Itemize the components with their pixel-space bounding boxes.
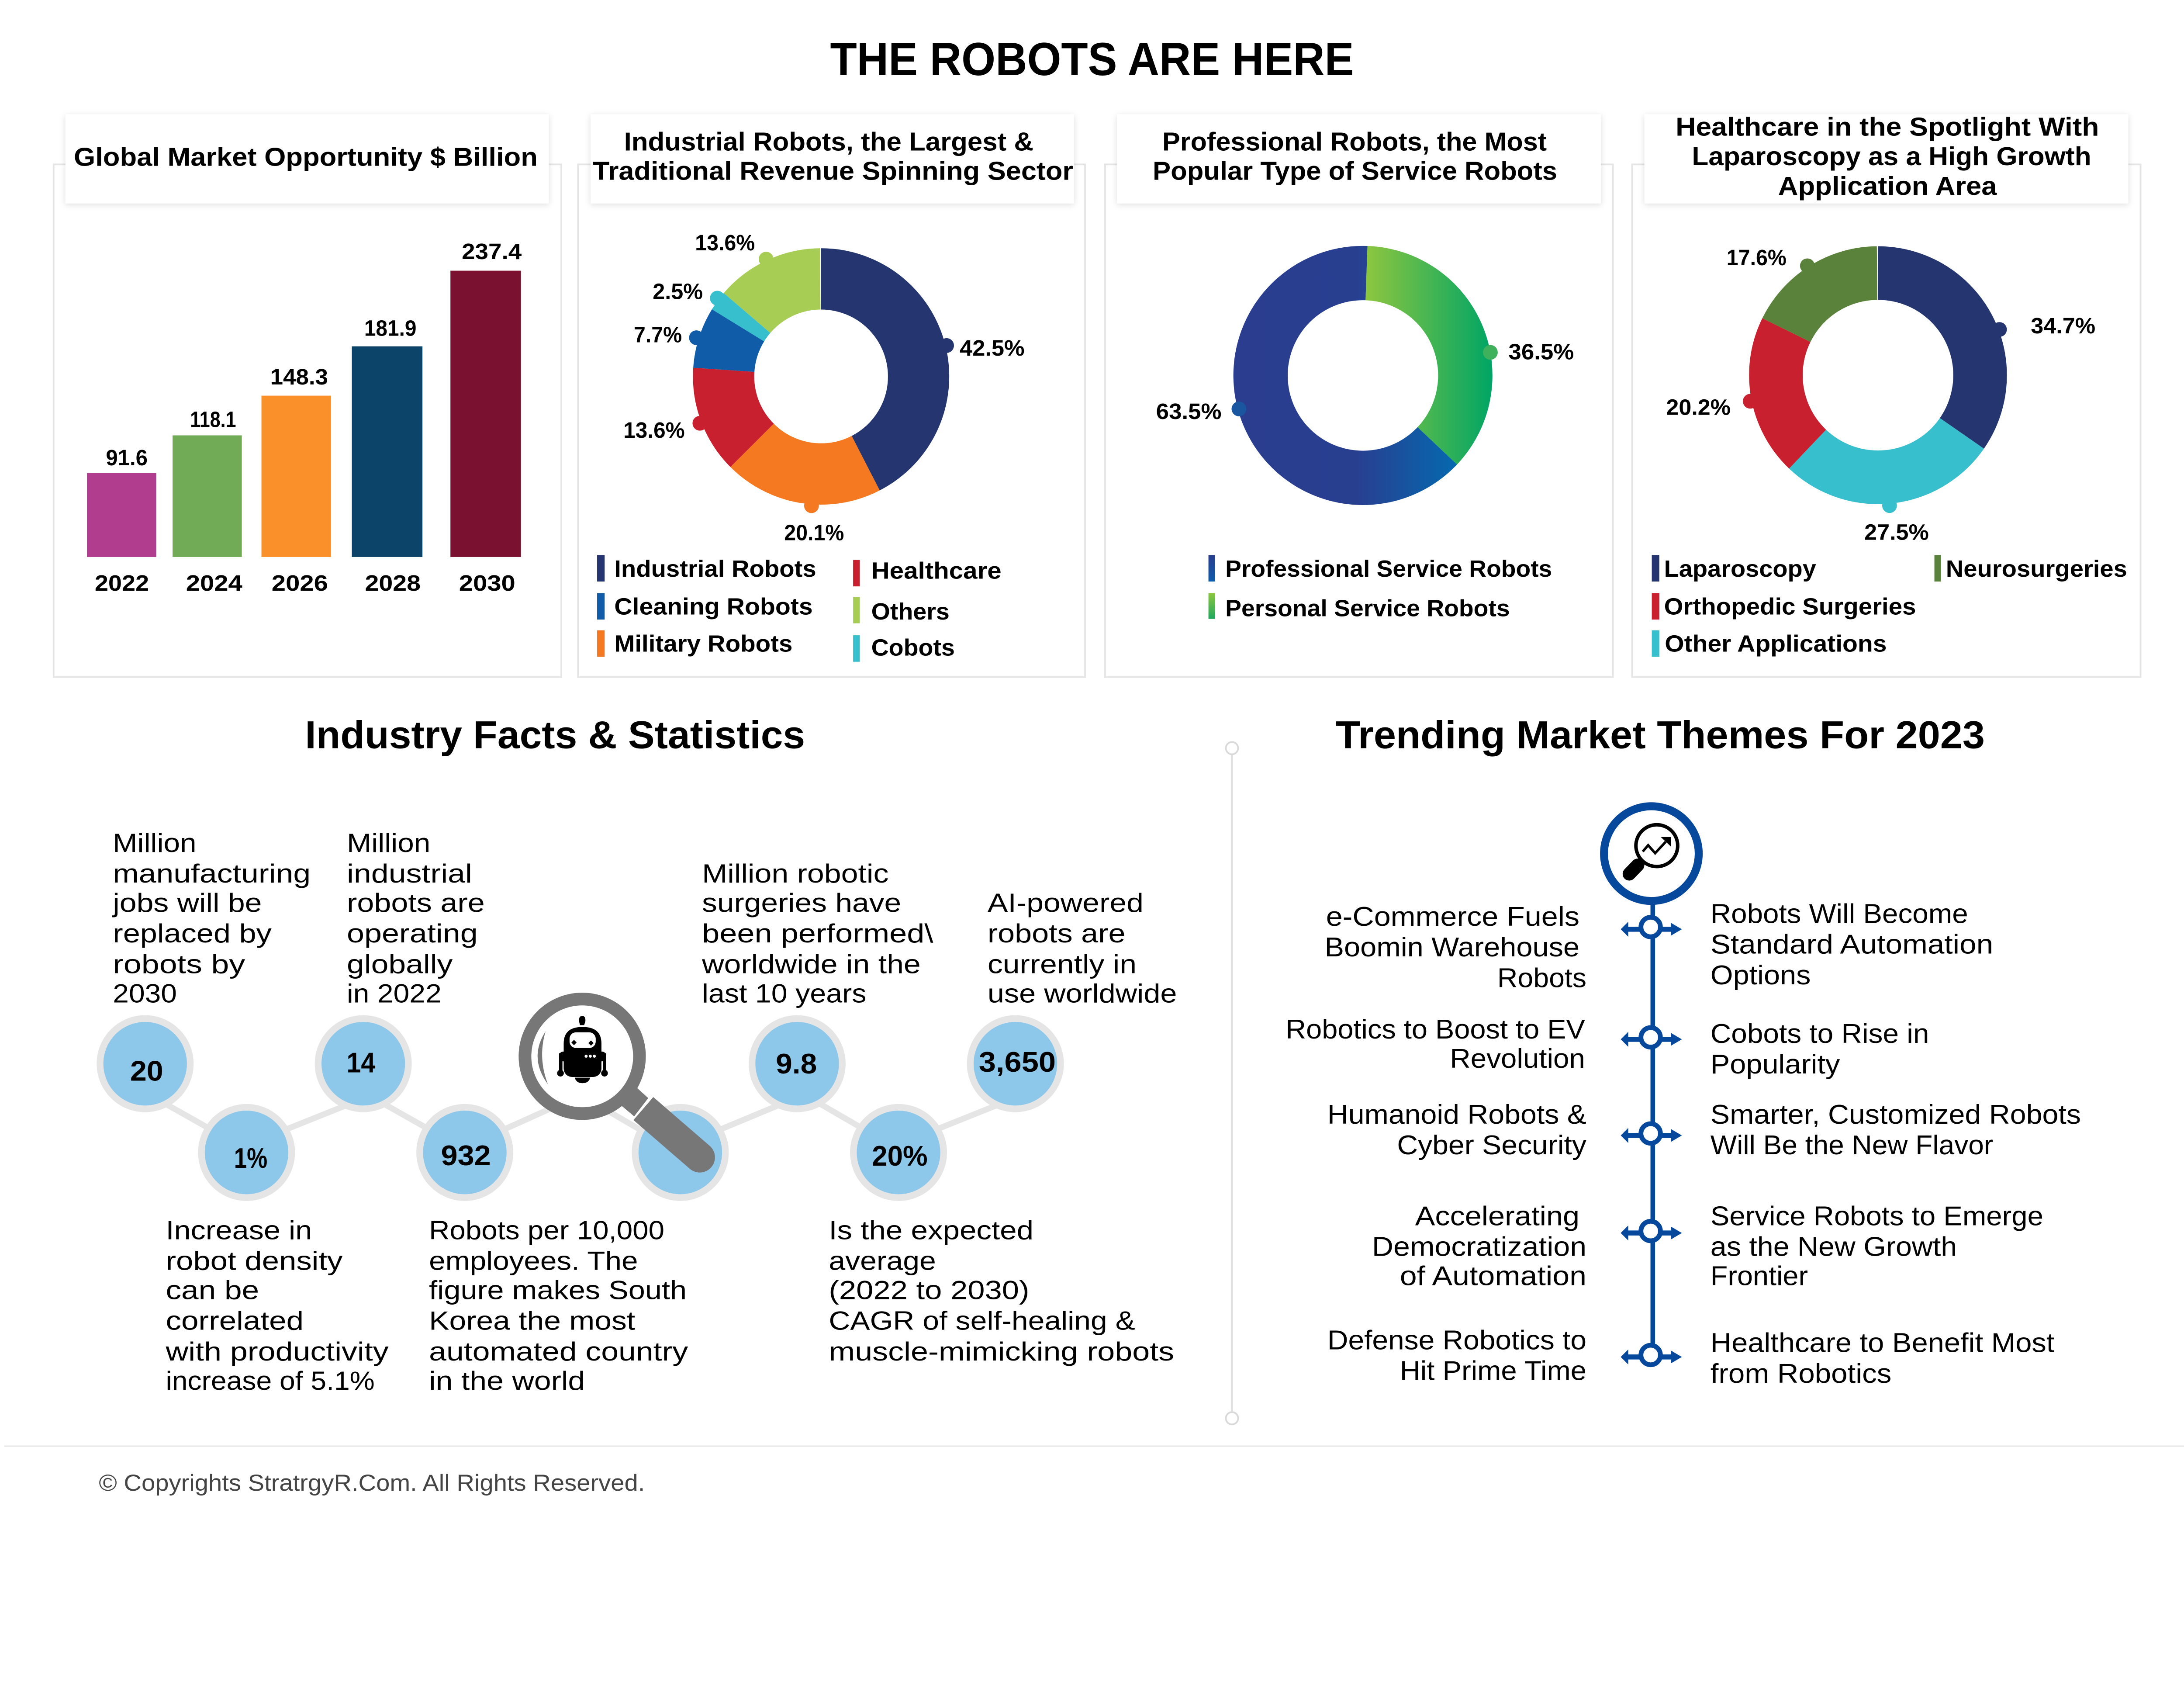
theme left: humanoid: Humanoid Robots & [1327, 1100, 1586, 1130]
heading: trending themes: Trending Market Themes For 2023 [1336, 713, 1985, 756]
legend: professional robots: Professional Service Robots [1225, 556, 1552, 582]
icon: search trend [1604, 806, 1699, 901]
node 1 [1621, 917, 1682, 937]
bar chart: 148.3 [270, 364, 328, 389]
fact: 20 million jobs: 2030 [113, 978, 177, 1008]
donut chart: healthcare: 20.2% [1666, 395, 1731, 419]
fact: 20% CAGR: (2022 to 2030) [829, 1275, 1030, 1305]
fact: 932 robots: automated country [429, 1336, 688, 1366]
fact: 14 million industrial robots: Million [347, 828, 430, 858]
panel: professional robots [1105, 114, 1613, 677]
panel: healthcare [1632, 112, 2141, 677]
node 3 [1621, 1124, 1682, 1143]
donut chart: healthcare: 17.6% [1727, 245, 1787, 270]
panel: industrial robots [578, 114, 1085, 677]
donut chart: professional robots [1156, 246, 1574, 505]
legend: healthcare: Laparoscopy [1664, 556, 1816, 582]
legend: professional robots: Personal Service Robots [1225, 595, 1510, 621]
heading card: healthcare: Healthcare in the Spotlight With [1676, 112, 2099, 141]
theme left: humanoid [1327, 1100, 1586, 1160]
fact: 20% CAGR: average [829, 1246, 936, 1276]
heading card: global market [66, 114, 549, 204]
theme right: healthcare: from Robotics [1711, 1359, 1891, 1389]
fact: 3,650 AI robots: currently in [988, 949, 1137, 979]
theme right: service robots: Frontier [1711, 1261, 1808, 1291]
theme left: defense: Hit Prime Time [1400, 1356, 1586, 1386]
bar chart: 118.1 [190, 407, 236, 432]
theme left: EV: Robotics to Boost to EV [1286, 1014, 1585, 1045]
stat: 20: 20 [130, 1055, 163, 1087]
heading card: industrial robots [591, 114, 1074, 204]
bar chart: 2026 [272, 571, 328, 595]
heading card: industrial robots: Industrial Robots, the Largest & [624, 127, 1033, 156]
theme left: e-commerce [1325, 902, 1586, 993]
fact: 14 million industrial robots: industrial [347, 859, 472, 888]
theme right: healthcare: Healthcare to Benefit Most [1711, 1328, 2054, 1358]
donut chart: industrial robots: 7.7% [634, 322, 682, 347]
legend: healthcare [1652, 555, 2127, 657]
fact: 9.8 million surgeries [702, 859, 933, 1008]
heading: industry facts: Industry Facts & Statistics [305, 713, 805, 756]
stat: 20% [854, 1107, 943, 1198]
theme right: customized: Smarter, Customized Robots [1711, 1100, 2081, 1130]
theme left: humanoid: Cyber Security [1397, 1130, 1586, 1160]
donut chart: industrial robots: 2.5% [653, 279, 703, 304]
fact: 932 robots: figure makes South [429, 1275, 687, 1305]
heading card: professional robots [1117, 114, 1601, 204]
theme left: democratization: Democratization [1372, 1232, 1586, 1262]
theme right: service robots [1711, 1201, 2043, 1291]
fact: 9.8 million surgeries: Million robotic [702, 859, 888, 888]
theme right: standard automation: Robots Will Become [1711, 899, 1968, 929]
stat: 932: 932 [441, 1139, 491, 1171]
donut chart: industrial robots: 20.1% [784, 520, 844, 545]
donut chart: healthcare: 27.5% [1864, 520, 1929, 545]
fact: 9.8 million surgeries: last 10 years [702, 978, 866, 1008]
fact: 1% density: robot density [166, 1246, 343, 1276]
fact: 20 million jobs: manufacturing [113, 859, 311, 888]
stat: 932 [420, 1107, 510, 1198]
legend: industrial robots: Military Robots [614, 631, 792, 657]
fact: 1% density [165, 1215, 389, 1395]
fact: 14 million industrial robots: globally [347, 949, 453, 979]
fact: 3,650 AI robots: robots are [988, 918, 1126, 948]
donut chart: healthcare [1666, 245, 2095, 545]
stat: 20%: 20% [872, 1140, 928, 1172]
fact: 20 million jobs: jobs will be [112, 888, 262, 917]
panel: global market opportunity [54, 114, 561, 677]
legend: healthcare: Orthopedic Surgeries [1664, 594, 1916, 620]
theme left: democratization [1372, 1201, 1586, 1291]
fact: 20 million jobs [112, 828, 311, 1008]
theme left: defense: Defense Robotics to [1327, 1325, 1586, 1355]
theme left: e-commerce: Boomin Warehouse [1325, 932, 1579, 962]
icon: robot [557, 1016, 608, 1083]
bar chart: 2030 [459, 571, 515, 595]
fact: 3,650 AI robots: AI-powered [988, 888, 1144, 917]
bar chart: 181.9 [364, 316, 416, 341]
node 4 [1621, 1221, 1682, 1241]
fact: 14 million industrial robots: in 2022 [347, 978, 442, 1008]
fact: 1% density: Increase in [166, 1215, 312, 1245]
donut chart: industrial robots: 42.5% [960, 336, 1025, 360]
fact: 1% density: with productivity [165, 1336, 389, 1366]
node 5 [1621, 1345, 1682, 1365]
bar chart: 91.6 [106, 445, 148, 470]
fact: 1% density: correlated [166, 1306, 304, 1336]
fact: 9.8 million surgeries: surgeries have [702, 888, 901, 917]
fact: 932 robots: Korea the most [429, 1306, 635, 1336]
legend: industrial robots: Others [871, 599, 950, 625]
donut chart: industrial robots: 13.6% [623, 418, 685, 443]
theme right: cobots: Cobots to Rise in [1711, 1019, 1929, 1049]
theme right: standard automation: Options [1711, 960, 1811, 990]
donut chart: industrial robots [623, 230, 1025, 545]
heading card: healthcare: Application Area [1778, 171, 1997, 201]
theme left: defense [1327, 1325, 1586, 1386]
bar chart: 2022 [95, 571, 149, 595]
legend: industrial robots: Industrial Robots [614, 556, 816, 582]
stat: 3,650: 3,650 [979, 1046, 1056, 1078]
theme right: standard automation [1711, 899, 1993, 990]
fact: 14 million industrial robots: operating [347, 918, 478, 948]
fact: 9.8 million surgeries: been performed\ [702, 918, 933, 948]
fact: 932 robots: Robots per 10,000 [429, 1215, 664, 1245]
fact: 20 million jobs: replaced by [113, 918, 272, 948]
legend: industrial robots [597, 555, 1002, 662]
node 2 [1621, 1028, 1682, 1047]
title: THE ROBOTS ARE HERE [830, 33, 1354, 85]
stat chain [100, 1018, 1061, 1198]
theme right: standard automation: Standard Automation [1711, 930, 1993, 960]
bar chart: 2024 [186, 571, 243, 595]
fact: 20% CAGR: Is the expected [829, 1215, 1033, 1245]
heading card: global market: Global Market Opportunity $ Billion [74, 142, 538, 171]
theme left: democratization: Accelerating [1415, 1201, 1579, 1232]
footer: © Copyrights StratrgyR.Com. All Rights Reserved. [99, 1470, 645, 1496]
section divider [1226, 742, 1238, 1424]
heading card: healthcare [1645, 112, 2128, 204]
theme right: healthcare [1711, 1328, 2054, 1389]
fact: 1% density: can be [166, 1275, 259, 1305]
theme right: customized [1711, 1100, 2081, 1160]
theme right: service robots: Service Robots to Emerge [1711, 1201, 2043, 1232]
theme left: e-commerce: Robots [1497, 963, 1586, 993]
theme right: customized: Will Be the New Flavor [1711, 1130, 1993, 1160]
stat: 9.8: 9.8 [776, 1048, 817, 1080]
legend: healthcare: Neurosurgeries [1946, 556, 2127, 582]
fact: 20 million jobs: Million [113, 828, 197, 858]
legend: professional robots [1209, 555, 1552, 621]
donut chart: professional robots: 36.5% [1508, 339, 1574, 364]
heading card: healthcare: Laparoscopy as a High Growth [1692, 142, 2091, 171]
theme right: service robots: as the New Growth [1711, 1232, 1957, 1262]
theme right: cobots [1711, 1019, 1929, 1080]
heading card: industrial robots: Traditional Revenue Spinning Sector [593, 156, 1073, 185]
icon: magnifier with robot [525, 999, 715, 1173]
stat: 3,650 [970, 1018, 1061, 1109]
heading card: professional robots: Popular Type of Service Robots [1153, 156, 1557, 185]
stat: 9.8 [752, 1018, 842, 1109]
donut chart: professional robots: 63.5% [1156, 399, 1222, 424]
bar chart: 237.4 [462, 239, 522, 264]
timeline [1604, 806, 1699, 1365]
fact: 20% CAGR: muscle-mimicking robots [829, 1336, 1174, 1366]
stat: 1% [201, 1107, 292, 1198]
fact: 14 million industrial robots: robots are [347, 888, 485, 917]
legend: healthcare: Other Applications [1665, 631, 1887, 657]
donut chart: industrial robots: 13.6% [695, 230, 755, 255]
stat: 14: 14 [346, 1047, 375, 1079]
theme left: democratization: of Automation [1400, 1261, 1586, 1291]
fact: 3,650 AI robots: use worldwide [988, 978, 1177, 1008]
theme left: e-commerce: e-Commerce Fuels [1326, 902, 1579, 932]
theme left: EV: Revolution [1450, 1044, 1585, 1074]
stat: 20 [100, 1018, 190, 1109]
hidden stat circle [635, 1107, 726, 1198]
theme right: cobots: Popularity [1711, 1049, 1840, 1080]
fact: 9.8 million surgeries: worldwide in the [702, 949, 921, 979]
legend: industrial robots: Cleaning Robots [614, 594, 813, 620]
bar chart [87, 239, 522, 595]
legend: industrial robots: Cobots [871, 635, 955, 661]
stat: 1%: 1% [234, 1142, 267, 1174]
fact: 20 million jobs: robots by [113, 949, 245, 979]
fact: 20% CAGR [829, 1215, 1174, 1366]
fact: 14 million industrial robots [347, 828, 485, 1008]
theme left: EV [1286, 1014, 1585, 1074]
fact: 932 robots: employees. The [429, 1246, 638, 1276]
legend: industrial robots: Healthcare [871, 558, 1002, 584]
donut chart: healthcare: 34.7% [2031, 313, 2095, 338]
fact: 1% density: increase of 5.1% [166, 1366, 375, 1395]
fact: 932 robots: in the world [429, 1366, 585, 1395]
fact: 932 robots [429, 1215, 688, 1395]
fact: 20% CAGR: CAGR of self-healing & [829, 1306, 1135, 1336]
fact: 3,650 AI robots [988, 888, 1177, 1008]
stat: 14 [318, 1018, 408, 1109]
bar chart: 2028 [365, 571, 421, 595]
heading card: professional robots: Professional Robots, the Most [1162, 127, 1547, 156]
